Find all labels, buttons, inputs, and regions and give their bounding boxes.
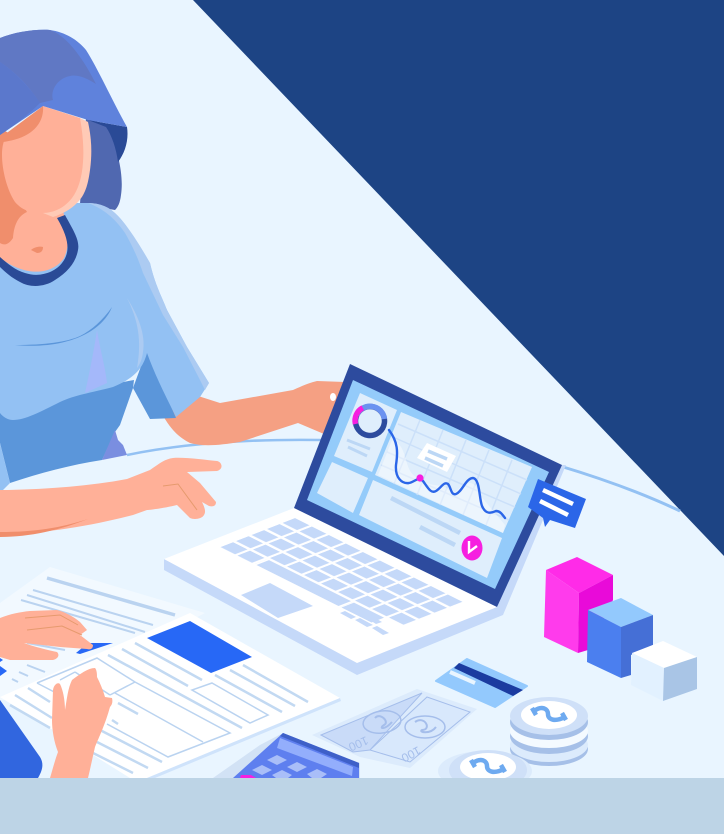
blue sleeve bbox=[0, 700, 42, 778]
collar bbox=[0, 215, 78, 286]
small keys bbox=[340, 611, 389, 635]
calculator bbox=[213, 733, 360, 778]
laptop base bbox=[164, 508, 497, 663]
shirt bbox=[0, 203, 209, 493]
blue block bbox=[147, 621, 252, 673]
dark navy triangle bbox=[193, 0, 724, 556]
pink block bbox=[544, 557, 613, 653]
chart grid bbox=[381, 420, 527, 525]
line chart curve bbox=[389, 430, 505, 518]
document table bbox=[37, 658, 230, 757]
white block bbox=[631, 641, 697, 701]
woman bbox=[0, 30, 209, 493]
front document bbox=[0, 613, 341, 778]
chart dot bbox=[416, 474, 424, 482]
neck and skin shadow bbox=[0, 128, 68, 272]
hair front bbox=[0, 30, 127, 135]
bill value text: 100 bbox=[399, 743, 423, 765]
laptop shadow edge bbox=[164, 465, 566, 675]
pen bbox=[0, 643, 113, 676]
upper hand on document bbox=[0, 610, 93, 660]
blue block bbox=[587, 598, 653, 678]
screen panels bbox=[317, 393, 532, 578]
bank notes bbox=[312, 689, 477, 768]
document lines bbox=[10, 643, 308, 773]
document box bbox=[192, 683, 268, 723]
front hand and arm bbox=[0, 458, 222, 537]
bottom band bbox=[0, 778, 724, 834]
lower panel lines bbox=[391, 498, 460, 545]
single coin bbox=[438, 750, 532, 791]
coin stack bbox=[510, 697, 588, 766]
white thumb detail bbox=[330, 393, 336, 401]
chat bubble bbox=[528, 479, 586, 528]
screen bbox=[307, 380, 549, 589]
table edge line bbox=[127, 440, 680, 511]
laptop bbox=[164, 364, 586, 675]
credit card bbox=[436, 659, 527, 707]
lower hand on document bbox=[50, 668, 112, 778]
tooltip bbox=[417, 443, 456, 472]
arm reaching to laptop bbox=[160, 381, 345, 445]
area under curve bbox=[378, 440, 505, 533]
bill value text: 100 bbox=[346, 733, 370, 754]
donut chart bbox=[353, 404, 386, 437]
clock badge bbox=[462, 536, 482, 560]
face bbox=[0, 106, 91, 217]
touchpad bbox=[241, 583, 313, 618]
screen bezel bbox=[294, 364, 562, 607]
sidebar lines bbox=[347, 440, 370, 456]
keyboard bbox=[219, 518, 463, 632]
back hair bbox=[80, 118, 128, 210]
bar blocks bbox=[544, 557, 697, 701]
back document bbox=[0, 567, 205, 700]
